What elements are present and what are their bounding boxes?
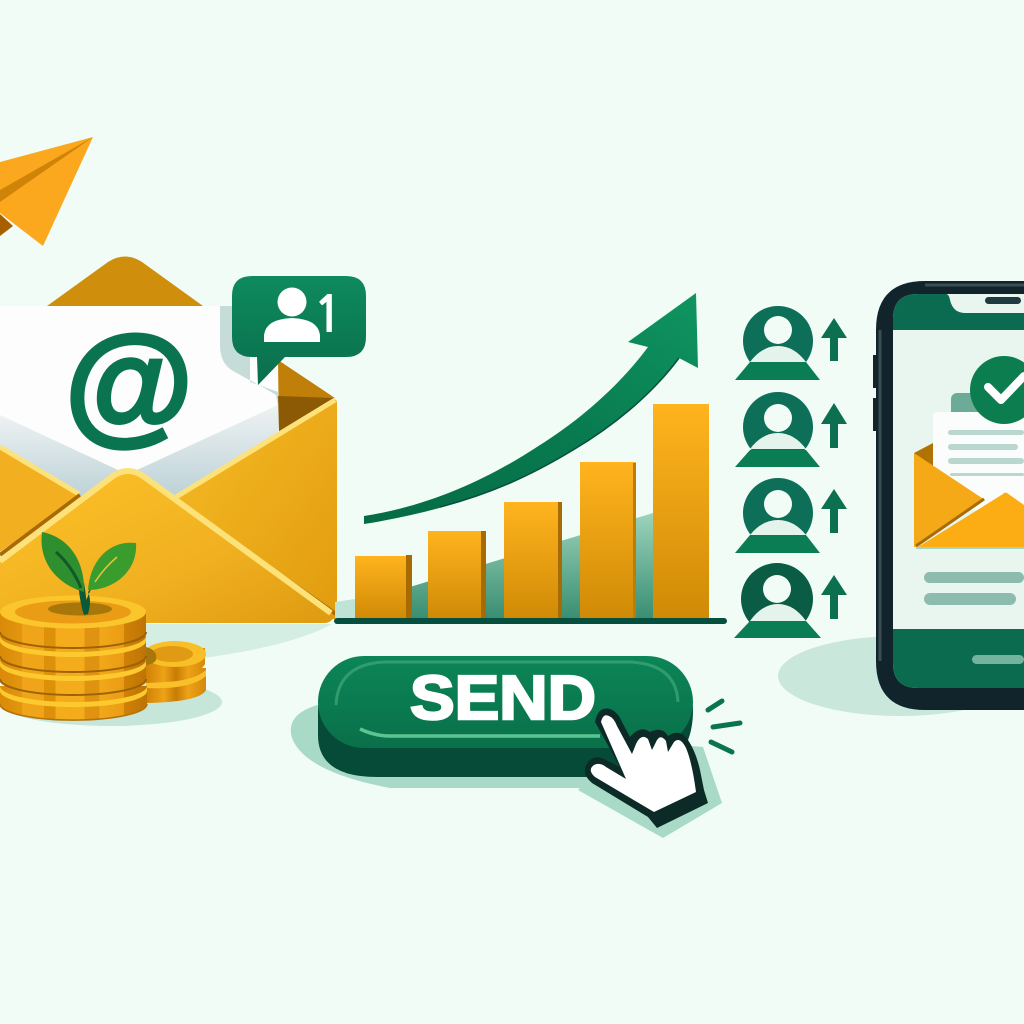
send button <box>291 656 740 838</box>
letter on phone <box>933 412 1024 510</box>
front flap shadow edge <box>0 494 336 614</box>
left side panel <box>0 447 80 552</box>
axis line <box>334 618 727 624</box>
sprout <box>78 578 88 615</box>
back flap <box>47 256 203 306</box>
icon: pointing hand cursor <box>585 709 708 828</box>
bars <box>355 404 709 618</box>
icon: coin stack with sprout <box>0 532 222 726</box>
phone shadow <box>778 636 1022 716</box>
coin 3 <box>0 660 146 695</box>
screen footer <box>893 629 1024 688</box>
bubble shadow on letter <box>220 306 278 406</box>
right side panel <box>176 400 337 619</box>
at sign: @ <box>65 309 193 456</box>
icon: smartphone with confirmed email <box>778 281 1024 716</box>
notification bubble with user and 1: 1 <box>313 291 343 340</box>
check circle <box>970 356 1024 424</box>
coin 4 <box>0 686 147 720</box>
button top <box>318 656 693 748</box>
shadow <box>0 678 222 726</box>
coin 1 <box>0 612 146 648</box>
text lines <box>924 572 1024 583</box>
icon: open email envelope <box>0 256 337 623</box>
click sparks <box>708 701 740 752</box>
screen header <box>893 294 1024 330</box>
shadow under envelope <box>0 624 332 672</box>
phone body <box>876 281 1024 710</box>
phone envelope <box>914 453 985 547</box>
tab behind letter <box>951 393 991 423</box>
growth arrow <box>364 293 698 524</box>
notification bubble with user and 1 <box>232 276 366 385</box>
green area behind bars <box>335 599 355 618</box>
bar chart with growth arrow <box>334 293 727 624</box>
small coins <box>144 641 206 703</box>
screen <box>893 294 1024 688</box>
audience row 2 <box>735 392 847 467</box>
letter shading <box>0 415 128 497</box>
button base <box>318 672 693 777</box>
audience row 4 <box>734 563 847 638</box>
front flap <box>0 471 333 623</box>
icon: paper plane <box>0 137 93 246</box>
letter <box>0 306 278 497</box>
audience icons with up arrows <box>734 306 847 638</box>
audience row 1 <box>735 306 847 380</box>
coin 2 <box>0 636 146 672</box>
audience row 3 <box>735 478 847 553</box>
inner back <box>278 360 335 432</box>
speaker <box>985 297 1021 304</box>
inner envelope back <box>914 443 933 470</box>
SEND label: SEND <box>410 664 596 733</box>
button shadow <box>291 705 722 838</box>
